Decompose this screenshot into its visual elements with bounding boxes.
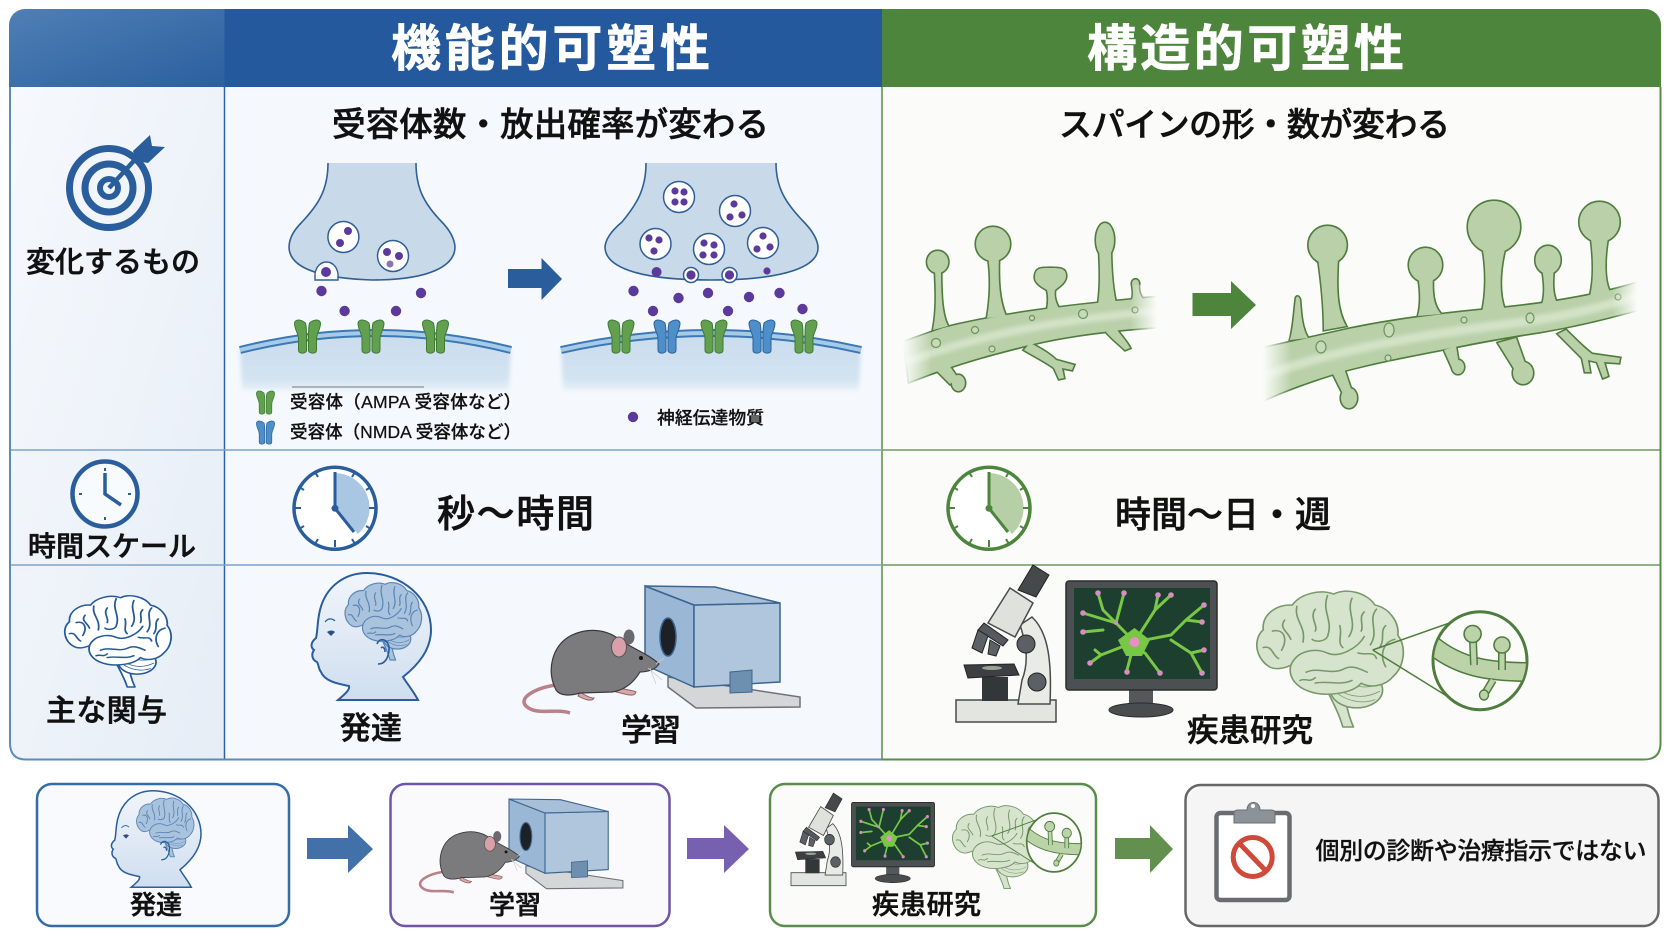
panel: development step xyxy=(37,784,289,926)
panel: disease research step: 疾患研究 xyxy=(872,890,981,920)
icon: baby head xyxy=(312,573,431,700)
icon: clipboard with prohibition sign xyxy=(1216,802,1290,900)
subheading: structural change: スパインの形・数が変わる xyxy=(1059,106,1450,143)
legend xyxy=(256,387,764,444)
table background xyxy=(9,9,1661,760)
icon: clock label xyxy=(72,462,138,526)
subheading: functional change: 受容体数・放出確率が変わる xyxy=(332,107,769,144)
arrow: green xyxy=(1115,825,1173,873)
icon: brain label xyxy=(65,596,171,687)
panel: disease research step xyxy=(770,784,1096,926)
panel: learning step: 学習 xyxy=(489,890,541,920)
text: hours to days and weeks: 時間～日・週 xyxy=(1115,494,1331,535)
icon: microscope, monitor, brain xyxy=(956,565,1530,727)
panel: learning step xyxy=(390,784,670,926)
icon: structural time clock xyxy=(948,467,1030,549)
comparison table xyxy=(9,9,1661,760)
row label: what changes: 変化するもの xyxy=(26,246,200,279)
panel: disclaimer: 個別の診断や治療指示ではない xyxy=(1316,838,1646,865)
label: learning: 学習 xyxy=(621,713,681,748)
legend: 神経伝達物質 xyxy=(657,408,764,428)
label: disease research: 疾患研究 xyxy=(1187,712,1313,748)
arrow: blue xyxy=(307,825,373,873)
icon: target xyxy=(70,135,165,228)
panel: development step: 発達 xyxy=(130,890,182,920)
arrow: before to after, functional xyxy=(508,258,562,300)
heading: functional plasticity: 機能的可塑性 xyxy=(391,21,710,77)
diagram: synapse before xyxy=(240,163,511,390)
arrow: purple xyxy=(687,825,749,873)
diagram: dendrite after xyxy=(1258,201,1642,408)
panel: disclaimer xyxy=(1186,785,1658,926)
legend: 受容体（NMDA 受容体など） xyxy=(290,422,521,442)
row label: time scale: 時間スケール xyxy=(28,531,196,562)
diagram: synapse after xyxy=(561,163,861,390)
arrow: before to after, structural xyxy=(1192,281,1256,329)
row label: main involvement: 主な関与 xyxy=(46,695,167,728)
legend: 受容体（AMPA 受容体など） xyxy=(290,392,521,412)
diagram: dendrite before xyxy=(898,223,1162,391)
icon: mouse and box xyxy=(524,586,800,713)
heading: structural plasticity: 構造的可塑性 xyxy=(1087,21,1404,77)
icon: functional time clock xyxy=(294,467,376,549)
label: development: 発達 xyxy=(340,711,402,746)
text: seconds to hours: 秒～時間 xyxy=(437,494,594,536)
